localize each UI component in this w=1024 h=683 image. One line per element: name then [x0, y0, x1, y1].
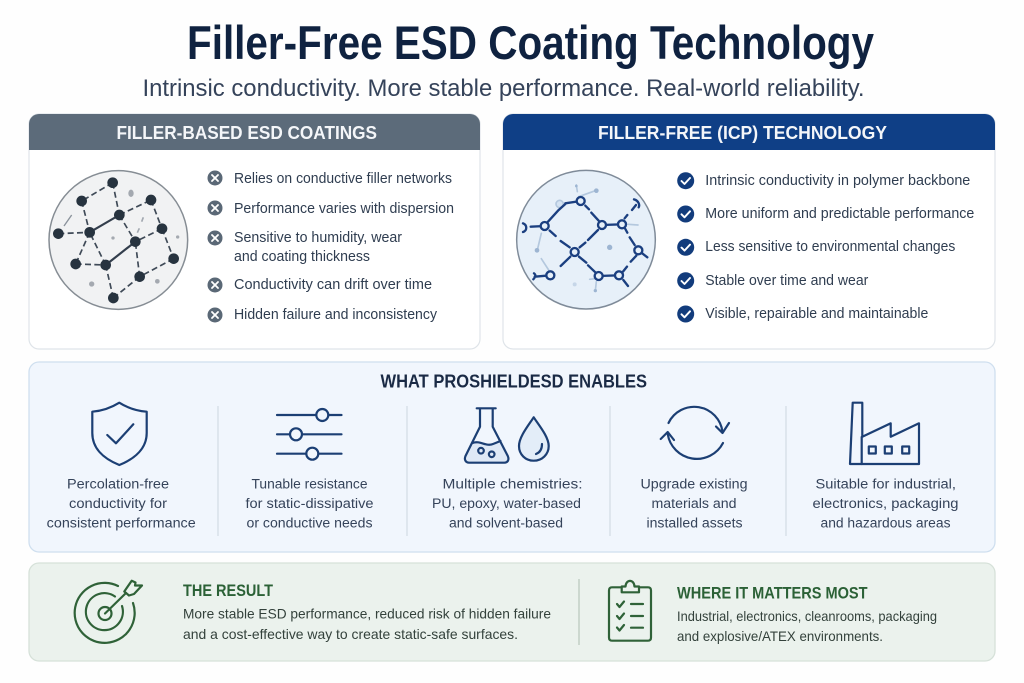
icon: refresh cycle — [661, 407, 729, 459]
feature: upgrade existing materials: materials and — [652, 496, 736, 512]
feature: upgrade existing materials: Upgrade existing — [640, 476, 748, 492]
list: filler-free benefits: Intrinsic conductivity in polymer backbone — [705, 173, 970, 189]
icon: shield with check — [92, 403, 147, 465]
text: the result: and a cost-effective way to create static-safe surfaces. — [183, 626, 518, 642]
list: filler-based drawbacks: Performance varies with dispersion — [234, 201, 454, 217]
panel: filler-based ESD coatings — [29, 114, 480, 349]
feature: multiple chemistries: PU, epoxy, water-based — [432, 496, 581, 512]
subtitle: Intrinsic conductivity. More stable performance. Real-world reliability. — [142, 75, 864, 102]
list: filler-free benefits: Visible, repairable and maintainable — [705, 306, 928, 322]
feature: tunable resistance: or conductive needs — [246, 516, 372, 532]
diagram: conductive polymer backbone — [517, 170, 655, 309]
list: filler-based drawbacks: and coating thickness — [234, 249, 370, 265]
panel header: filler-based: FILLER-BASED ESD COATINGS — [116, 123, 377, 143]
feature: upgrade existing materials — [640, 407, 748, 532]
feature: multiple chemistries: and solvent-based — [449, 516, 563, 532]
feature: suitable sectors: Suitable for industrial, — [816, 476, 956, 492]
icon: checklist clipboard — [609, 581, 651, 641]
feature: suitable sectors: electronics, packaging — [812, 496, 958, 512]
text: where it matters most: WHERE IT MATTERS MOST — [677, 584, 868, 602]
icon: factory — [850, 403, 919, 464]
feature: suitable sectors — [812, 403, 958, 532]
feature: percolation-free conductivity: consistent performance — [47, 516, 196, 532]
text: the result: More stable ESD performance, reduced risk of hidden failure — [183, 606, 551, 622]
panel: result and where it matters — [29, 563, 995, 661]
list: filler-based drawbacks: Conductivity can drift over time — [234, 277, 432, 293]
text: where it matters most — [677, 584, 937, 644]
panel: what ProShieldESD enables — [29, 362, 995, 552]
icon: flask — [465, 408, 508, 463]
list: filler-based drawbacks: Relies on conductive filler networks — [234, 171, 452, 187]
list: filler-free benefits: Less sensitive to environmental changes — [705, 239, 955, 255]
title: Filler-Free ESD Coating Technology — [187, 16, 874, 69]
text: the result: THE RESULT — [183, 582, 273, 600]
section heading: WHAT PROSHIELDESD ENABLES — [380, 372, 647, 392]
icon: target with dart — [75, 581, 142, 643]
diagram: filler particle network — [49, 171, 188, 309]
feature: multiple chemistries — [432, 408, 582, 532]
feature: tunable resistance: Tunable resistance — [252, 476, 368, 492]
feature: percolation-free conductivity: conductivity for — [69, 496, 167, 512]
icon: sliders — [277, 409, 342, 460]
list: filler-based drawbacks: Sensitive to humidity, wear — [234, 230, 402, 246]
feature: percolation-free conductivity — [47, 403, 196, 532]
panel header: filler-based — [29, 114, 480, 150]
feature: tunable resistance: for static-dissipative — [246, 496, 374, 512]
feature: percolation-free conductivity: Percolation-free — [67, 476, 169, 492]
list: filler-free benefits: More uniform and predictable performance — [705, 206, 974, 222]
text: where it matters most: Industrial, electronics, cleanrooms, packaging — [677, 608, 937, 624]
panel header: filler-free: FILLER-FREE (ICP) TECHNOLOGY — [598, 123, 887, 143]
list: filler-free benefits: Stable over time and wear — [705, 273, 868, 289]
list: filler-based drawbacks — [208, 170, 454, 323]
feature: suitable sectors: and hazardous areas — [820, 516, 950, 532]
list: filler-free benefits — [677, 172, 974, 322]
feature: multiple chemistries: Multiple chemistries: — [442, 476, 582, 492]
text: where it matters most: and explosive/ATEX environments. — [677, 628, 883, 644]
feature: tunable resistance — [246, 409, 374, 532]
panel: filler-free ICP technology — [503, 114, 995, 349]
list: filler-based drawbacks: Hidden failure and inconsistency — [234, 307, 438, 323]
feature: upgrade existing materials: installed assets — [646, 516, 742, 532]
icon: water drop — [519, 417, 549, 461]
panel header: filler-free — [503, 114, 995, 150]
text: the result — [183, 582, 551, 642]
